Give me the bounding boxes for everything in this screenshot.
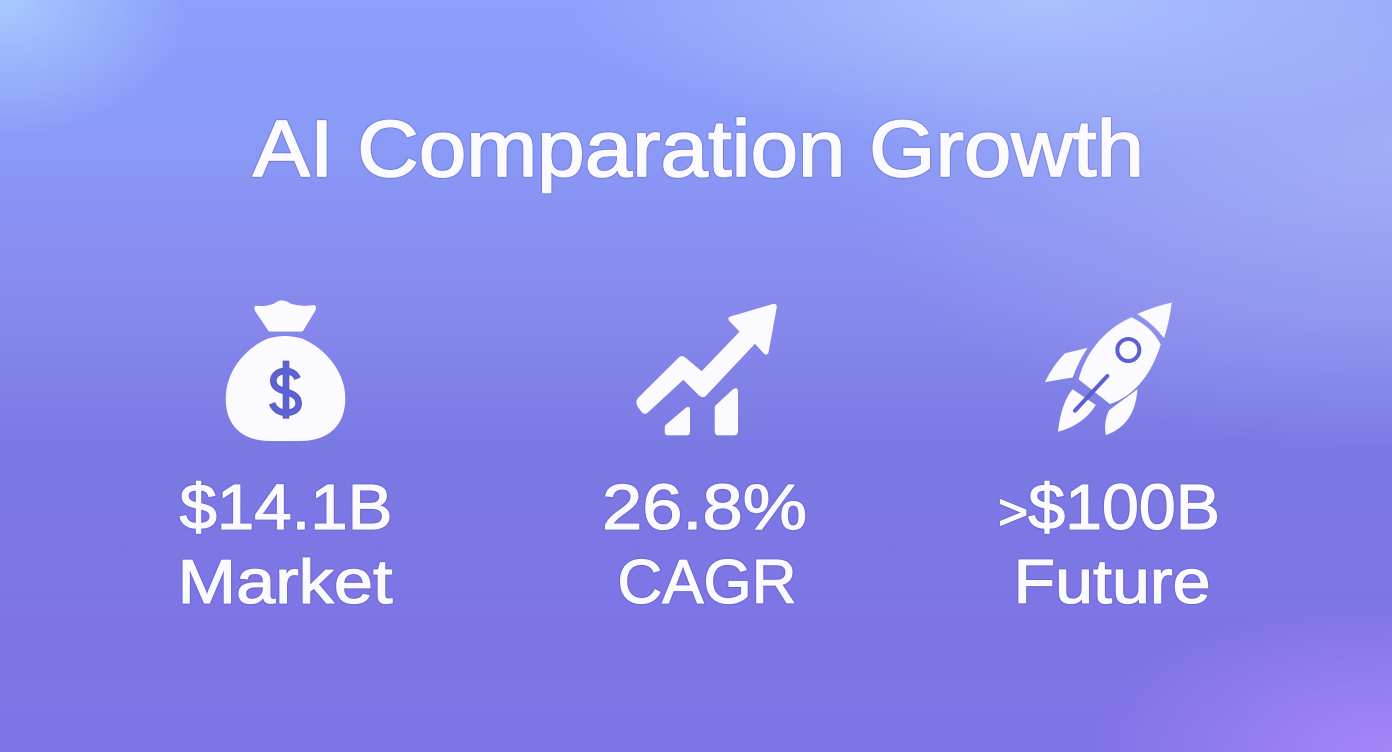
panel: CAGR [602, 304, 807, 617]
icon: money bag [226, 301, 345, 441]
value: future: >$100B [998, 471, 1220, 543]
icon: dollar sign [272, 361, 299, 419]
value: market: $14.1B [180, 471, 392, 543]
label: market: Market [178, 548, 392, 617]
icon: rocket [1045, 303, 1172, 435]
icon: growth arrow with bars [637, 304, 777, 435]
title: AI Comparation Growth [253, 104, 1144, 193]
label: CAGR: CAGR [618, 548, 796, 617]
label: future: Future [1014, 548, 1210, 617]
value: CAGR: 26.8% [602, 471, 807, 543]
panel: future [998, 303, 1220, 617]
icon: rocket porthole [1117, 339, 1139, 361]
panel: market [178, 301, 392, 617]
icon: rocket exhaust slot [1075, 376, 1107, 411]
